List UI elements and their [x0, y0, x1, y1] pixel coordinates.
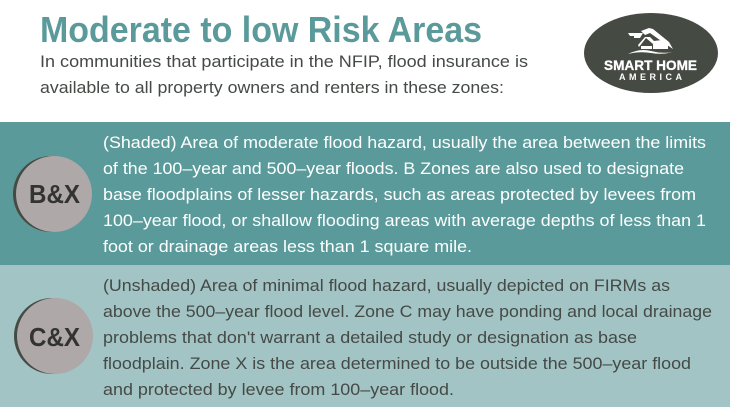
badge: C&X: C&X: [29, 322, 81, 352]
logo: Smart Home America: AMERICA: [619, 72, 682, 82]
B&X description: foot or drainage areas less than 1 square mile.: [103, 237, 472, 256]
B&X description: 100–year flood, or shallow flooding areas with average depths of less than 1: [103, 211, 706, 230]
logo: Smart Home America: SMART HOME: [604, 57, 697, 73]
icon: house: [628, 28, 673, 54]
intro text: In communities that participate in the NFIP, flood insurance is: [40, 52, 528, 71]
panel: C&X zones: [0, 265, 730, 407]
C&X description: and protected by levee from 100–year flood.: [103, 380, 454, 399]
badge: B&X: [13, 156, 92, 232]
title: Moderate to low Risk Areas: [40, 9, 482, 50]
intro text: [40, 52, 528, 97]
badge: B&X: B&X: [29, 179, 81, 209]
B&X description: [103, 133, 706, 256]
C&X description: (Unshaded) Area of minimal flood hazard, usually depicted on FIRMs as: [103, 276, 670, 295]
badge: C&X: [14, 298, 93, 374]
B&X description: of the 100–year and 500–year floods. B Zones are also used to designate: [103, 159, 684, 178]
B&X description: (Shaded) Area of moderate flood hazard, usually the area between the limits: [103, 133, 706, 152]
B&X description: base floodplains of lesser hazards, such as areas protected by levees from: [103, 185, 696, 204]
intro text: available to all property owners and renters in these zones:: [40, 78, 504, 97]
C&X description: above the 500–year flood level. Zone C may have ponding and local drainage: [103, 302, 712, 321]
panel: B&X zones: [0, 122, 730, 265]
logo: Smart Home America: [584, 13, 718, 93]
C&X description: problems that don't warrant a detailed study or designation as base: [103, 328, 637, 347]
C&X description: [103, 276, 712, 399]
C&X description: floodplain. Zone X is the area determined to be outside the 500–year flood: [103, 354, 691, 373]
